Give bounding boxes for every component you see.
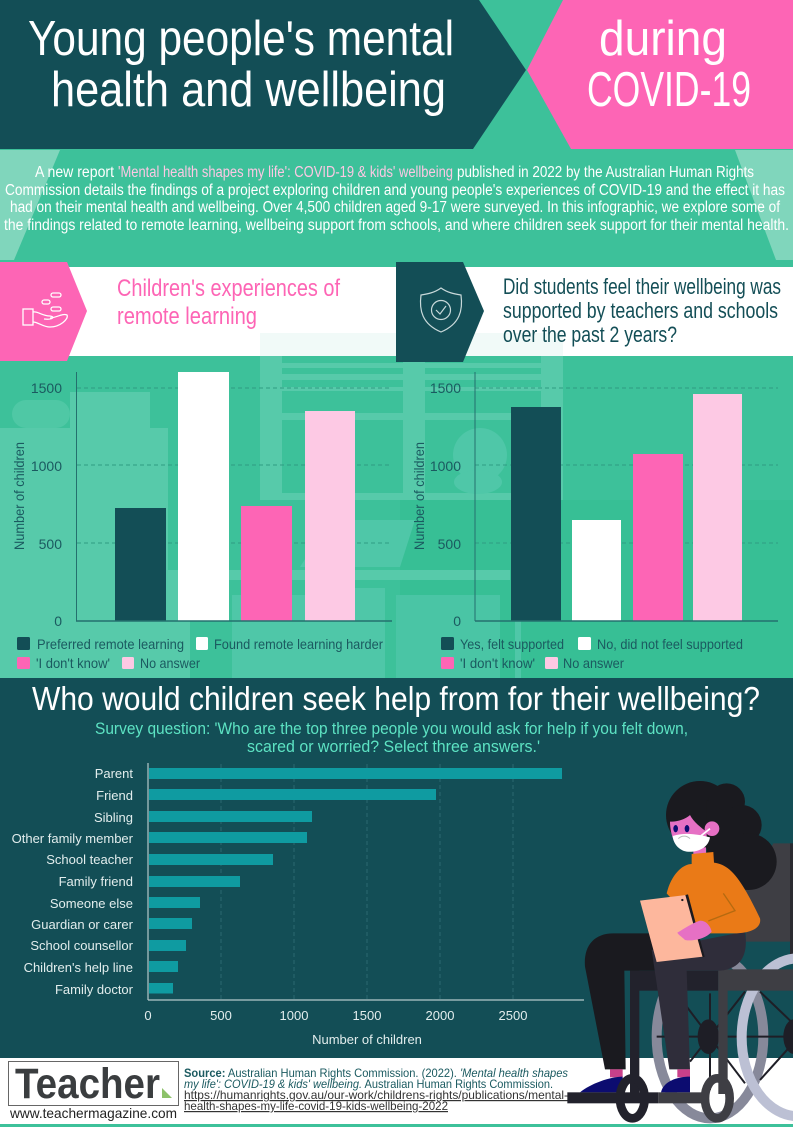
logo: Teacher: Teacher <box>15 1060 160 1108</box>
background classroom illustration <box>0 356 563 678</box>
source citation: health-shapes-my-life-covid-19-kids-wellbeing-2022 <box>184 1099 448 1113</box>
horizontal bar chart: sources of help: Parent <box>95 766 133 781</box>
intro panel corners <box>0 150 793 260</box>
bar chart: wellbeing support: 1000 <box>430 458 461 474</box>
horizontal bar chart: sources of help: 1000 <box>280 1008 308 1023</box>
bar chart: remote learning: 500 <box>39 536 62 552</box>
horizontal bar chart: sources of help: 500 <box>210 1008 232 1023</box>
header: title banner: health and wellbeing <box>51 63 446 117</box>
bar chart: remote learning <box>12 372 392 629</box>
horizontal bar chart: sources of help: Family friend <box>59 874 133 889</box>
horizontal bar chart: sources of help <box>12 763 584 1047</box>
intro text: published in 2022 by the Australian Human Rights <box>457 164 754 181</box>
legend: remote learning: Preferred remote learning <box>37 636 184 652</box>
horizontal bar chart: sources of help: Number of children <box>312 1032 422 1047</box>
bar chart: wellbeing support: 500 <box>438 536 461 552</box>
survey question subtitle: Survey question: 'Who are the top three people you would ask for help if you felt down, <box>95 719 688 738</box>
header: title banner <box>0 0 526 149</box>
legend: remote learning: No answer <box>140 655 200 671</box>
bar chart: wellbeing support: 0 <box>453 613 461 629</box>
horizontal bar chart: sources of help: Guardian or carer <box>31 917 134 932</box>
source citation <box>184 1066 568 1113</box>
legend: wellbeing support: No answer <box>563 655 624 671</box>
legend: wellbeing support: Yes, felt supported <box>460 636 564 652</box>
source citation: my life': COVID-19 & kids' wellbeing. Australian Human Rights Commission. <box>184 1077 553 1091</box>
bar chart: remote learning: 1000 <box>31 458 62 474</box>
section heading: remote learning: remote learning <box>117 303 257 330</box>
footer <box>0 1058 793 1127</box>
section heading: wellbeing support: over the past 2 years? <box>503 322 677 347</box>
survey question subtitle <box>95 719 688 756</box>
legend: remote learning: 'I don't know' <box>36 655 110 671</box>
horizontal bar chart: sources of help: Sibling <box>94 810 133 825</box>
intro text: 'Mental health shapes my life': COVID-19 & kids' wellbeing <box>118 164 453 181</box>
intro text: A new report <box>35 164 115 181</box>
bar chart: remote learning: 1500 <box>31 380 62 396</box>
horizontal bar chart: sources of help: 2000 <box>426 1008 454 1023</box>
bar chart: wellbeing support: Number of children <box>412 442 427 550</box>
section heading: remote learning <box>0 262 340 361</box>
horizontal bar chart: sources of help: School teacher <box>46 852 134 867</box>
source citation: https://humanrights.gov.au/our-work/childrens-rights/publications/mental- <box>184 1088 568 1102</box>
horizontal bar chart: sources of help: Friend <box>96 788 133 803</box>
icon: shield with check <box>420 288 462 332</box>
section heading: remote learning: Children's experiences of <box>117 275 340 302</box>
header: title banner: Young people's mental <box>28 12 454 66</box>
website url: www.teachermagazine.com <box>9 1105 177 1121</box>
panel: who would children seek help from <box>0 678 793 1058</box>
bar chart: remote learning: 0 <box>54 613 62 629</box>
survey question subtitle: scared or worried? Select three answers.' <box>247 737 540 756</box>
section header band <box>60 267 793 356</box>
legend: remote learning <box>17 636 383 671</box>
horizontal bar chart: sources of help: Someone else <box>50 896 133 911</box>
bar chart: wellbeing support <box>412 372 778 629</box>
icon: hand with coins <box>23 293 67 327</box>
legend: wellbeing support: No, did not feel supported <box>597 636 743 652</box>
horizontal bar chart: sources of help: Other family member <box>12 831 134 846</box>
legend: remote learning: Found remote learning harder <box>214 636 383 652</box>
horizontal bar chart: sources of help: School counsellor <box>30 938 134 953</box>
horizontal bar chart: sources of help: 2500 <box>499 1008 527 1023</box>
section heading: wellbeing support <box>396 262 781 362</box>
legend: wellbeing support <box>441 636 743 671</box>
intro text <box>4 164 789 234</box>
source citation: Source: Australian Human Rights Commission. (2022). 'Mental health shapes <box>184 1066 568 1080</box>
horizontal bar chart: sources of help: 0 <box>144 1008 152 1023</box>
horizontal bar chart: sources of help: 1500 <box>353 1008 381 1023</box>
horizontal bar chart: sources of help: Children's help line <box>24 960 133 975</box>
illustration: young person in wheelchair wearing a mask <box>567 781 793 1118</box>
bar chart: wellbeing support: 1500 <box>430 380 461 396</box>
legend: wellbeing support: 'I don't know' <box>460 655 535 671</box>
header: during COVID-19 banner: during <box>599 12 727 66</box>
header: during COVID-19 banner <box>527 0 793 149</box>
bar chart: remote learning: Number of children <box>12 442 27 550</box>
horizontal bar chart: sources of help: Family doctor <box>55 982 134 997</box>
